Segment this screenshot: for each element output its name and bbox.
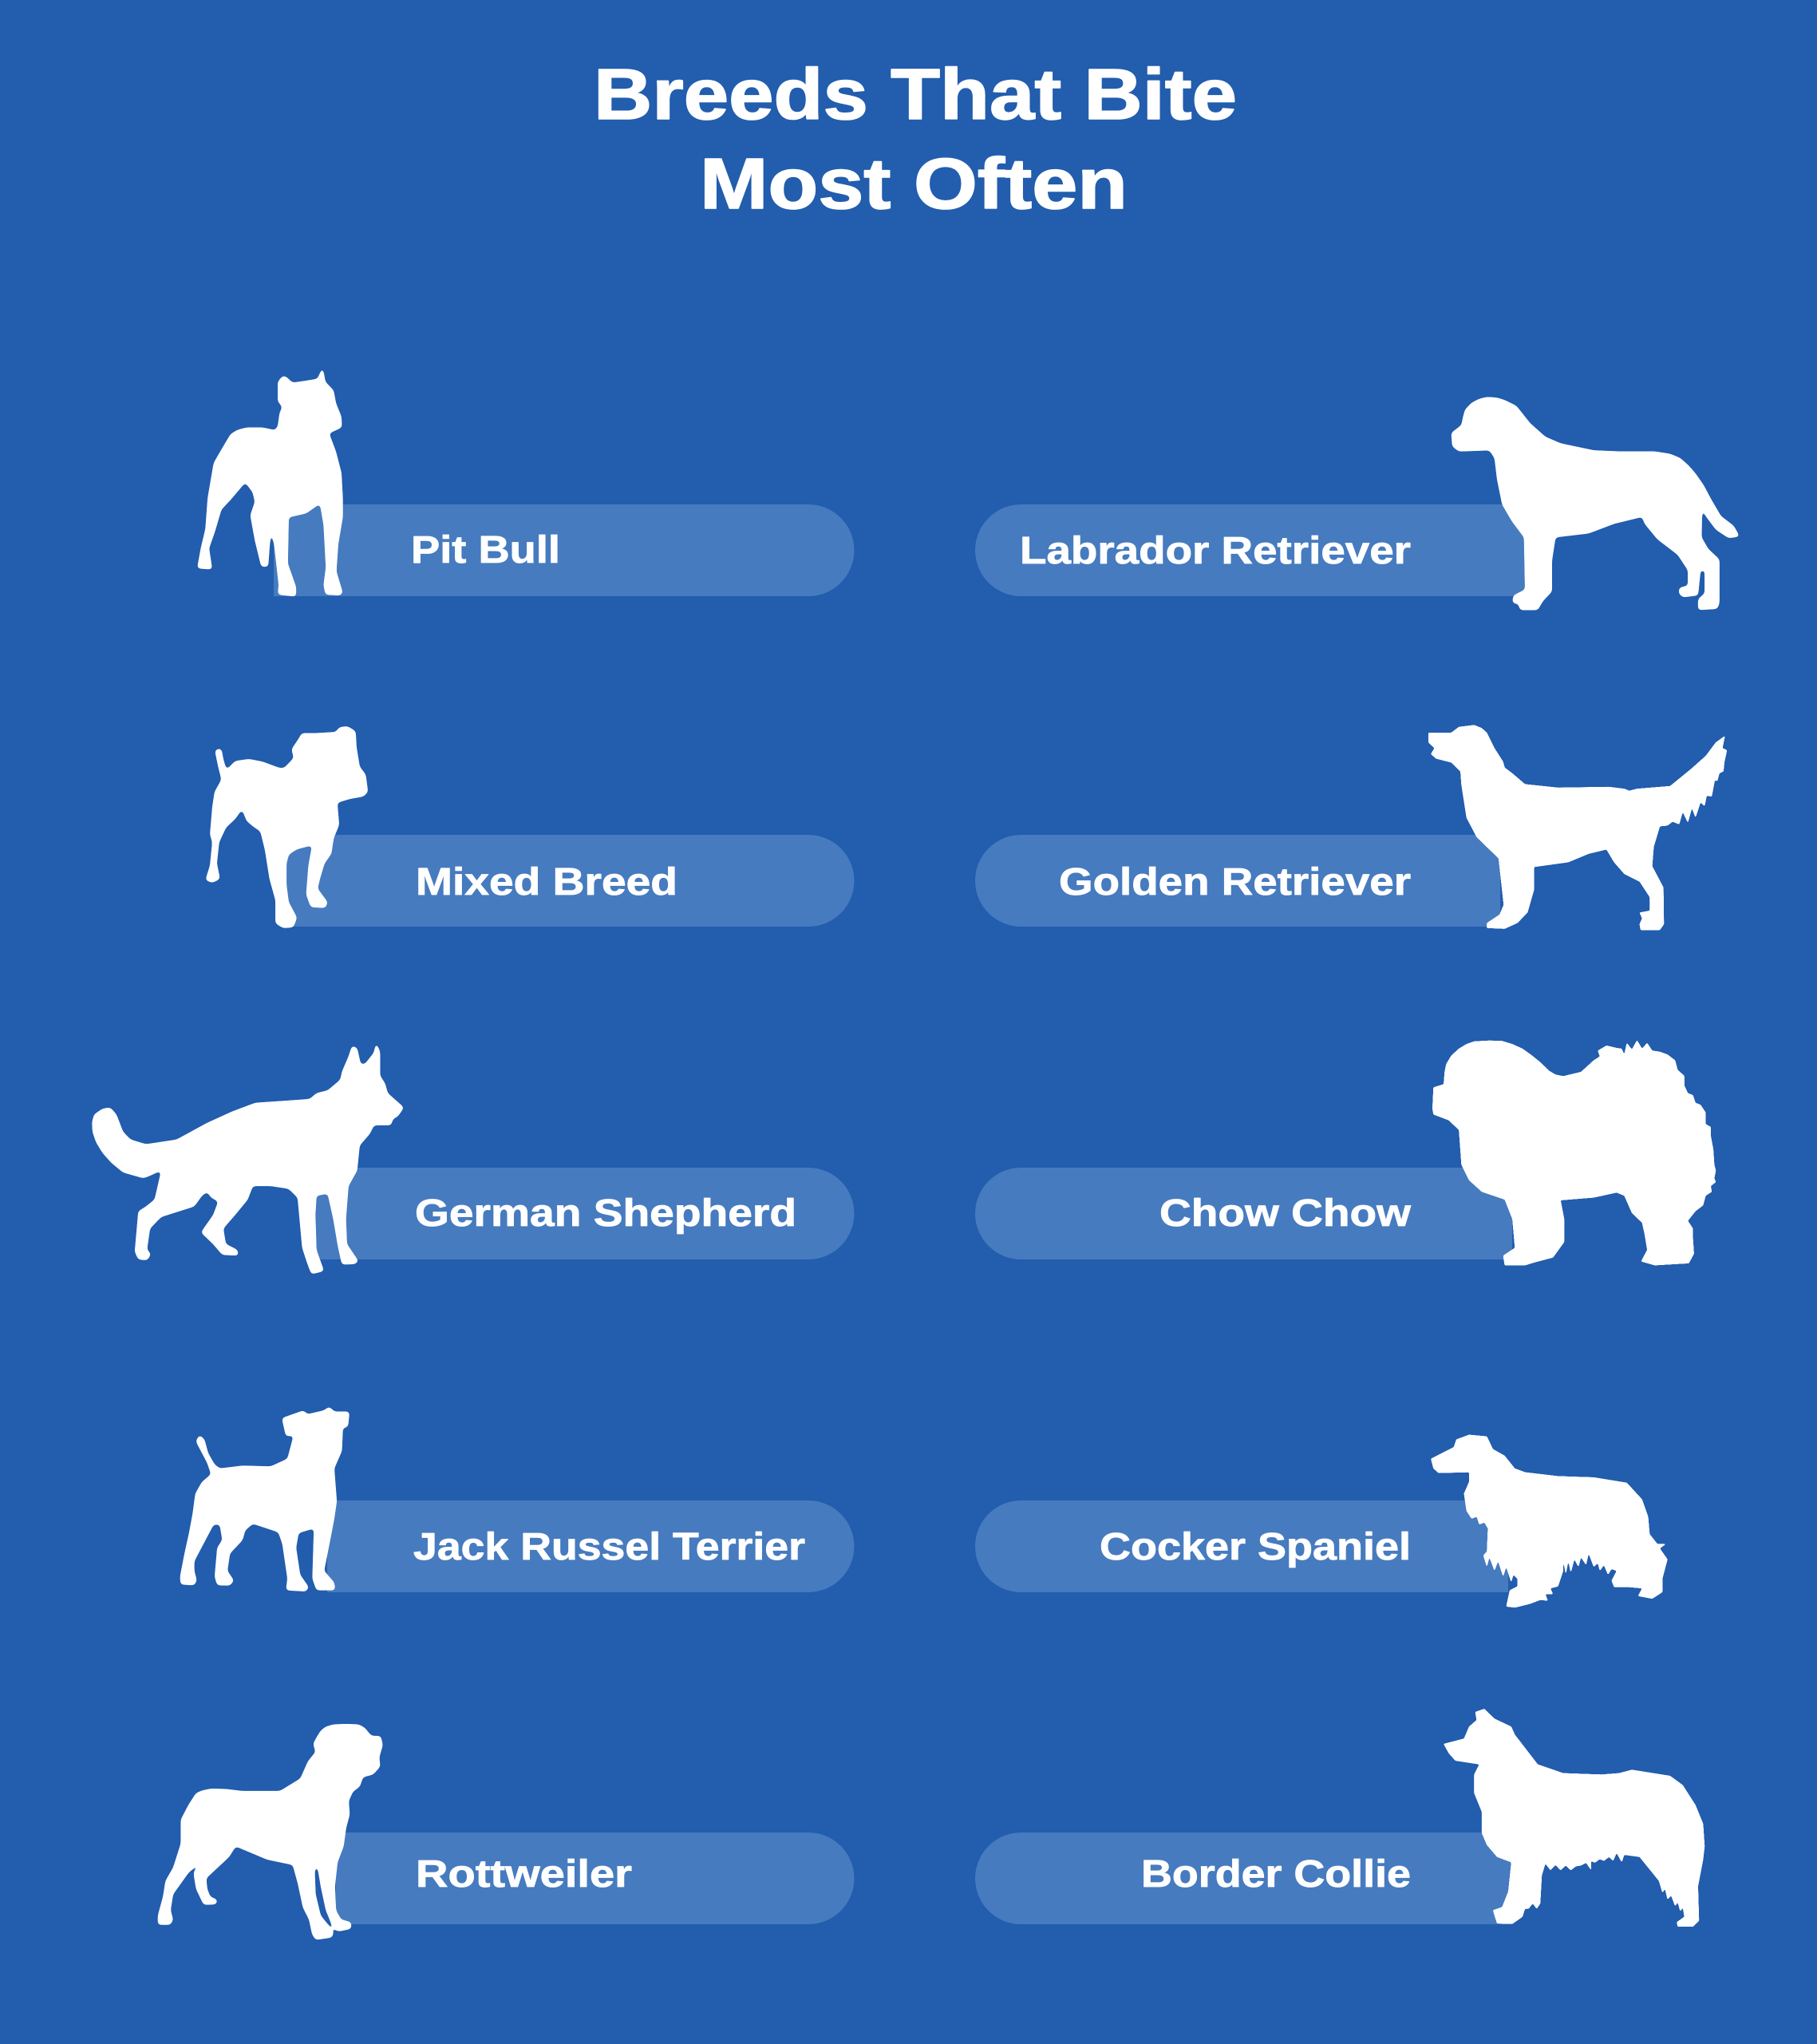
label: Mixed Breed: Mixed Breed: [416, 861, 677, 903]
label: Chow Chow: Chow Chow: [1159, 1192, 1412, 1235]
icon: jack russel terrier silhouette: [180, 1406, 350, 1591]
pill: Mixed Breed: [283, 835, 854, 927]
label: Rottweiler: Rottweiler: [416, 1853, 632, 1896]
pill: German Shepherd: [316, 1168, 854, 1259]
title: Breeds That Bite: [594, 55, 1237, 135]
icon: golden retriever silhouette: [1428, 725, 1727, 930]
pill: Cocker Spaniel: [975, 1500, 1508, 1592]
label: Golden Retriever: Golden Retriever: [1059, 861, 1411, 903]
label: Pit Bull: Pit Bull: [411, 529, 560, 571]
icon: cocker spaniel silhouette: [1431, 1435, 1668, 1607]
icon: border collie silhouette: [1444, 1709, 1704, 1927]
label: Jack Russel Terrier: Jack Russel Terrier: [413, 1526, 805, 1568]
row: Border Collie: [975, 1709, 1704, 1927]
row: Cocker Spaniel: [975, 1435, 1668, 1607]
label: Border Collie: Border Collie: [1141, 1853, 1411, 1896]
pill: Chow Chow: [975, 1168, 1512, 1259]
pill: Golden Retriever: [975, 835, 1500, 927]
icon: labrador silhouette: [1452, 397, 1740, 610]
icon: mixed breed silhouette: [205, 726, 368, 928]
row: Jack Russel Terrier: [180, 1406, 854, 1592]
label: German Shepherd: German Shepherd: [415, 1192, 796, 1235]
row: Labrador Retriever: [975, 397, 1740, 610]
row: Chow Chow: [975, 1040, 1716, 1265]
pill: Rottweiler: [336, 1832, 854, 1924]
row: German Shepherd: [92, 1042, 854, 1275]
title: [594, 55, 1237, 224]
row: Golden Retriever: [975, 725, 1727, 930]
pill: Labrador Retriever: [975, 504, 1528, 596]
label: Cocker Spaniel: Cocker Spaniel: [1100, 1526, 1411, 1568]
pill: Border Collie: [975, 1832, 1512, 1924]
icon: chow chow silhouette: [1432, 1040, 1716, 1265]
row: Pit Bull: [197, 366, 854, 596]
pill: Pit Bull: [274, 504, 854, 596]
label: Labrador Retriever: Labrador Retriever: [1020, 530, 1411, 572]
row: Mixed Breed: [205, 726, 854, 928]
pill: Jack Russel Terrier: [327, 1500, 854, 1592]
icon: rottweiler silhouette: [158, 1724, 383, 1940]
title: Most Often: [700, 144, 1128, 224]
row: Rottweiler: [158, 1724, 854, 1940]
icon: pit bull silhouette: [197, 366, 343, 596]
icon: german shepherd silhouette: [92, 1042, 404, 1275]
